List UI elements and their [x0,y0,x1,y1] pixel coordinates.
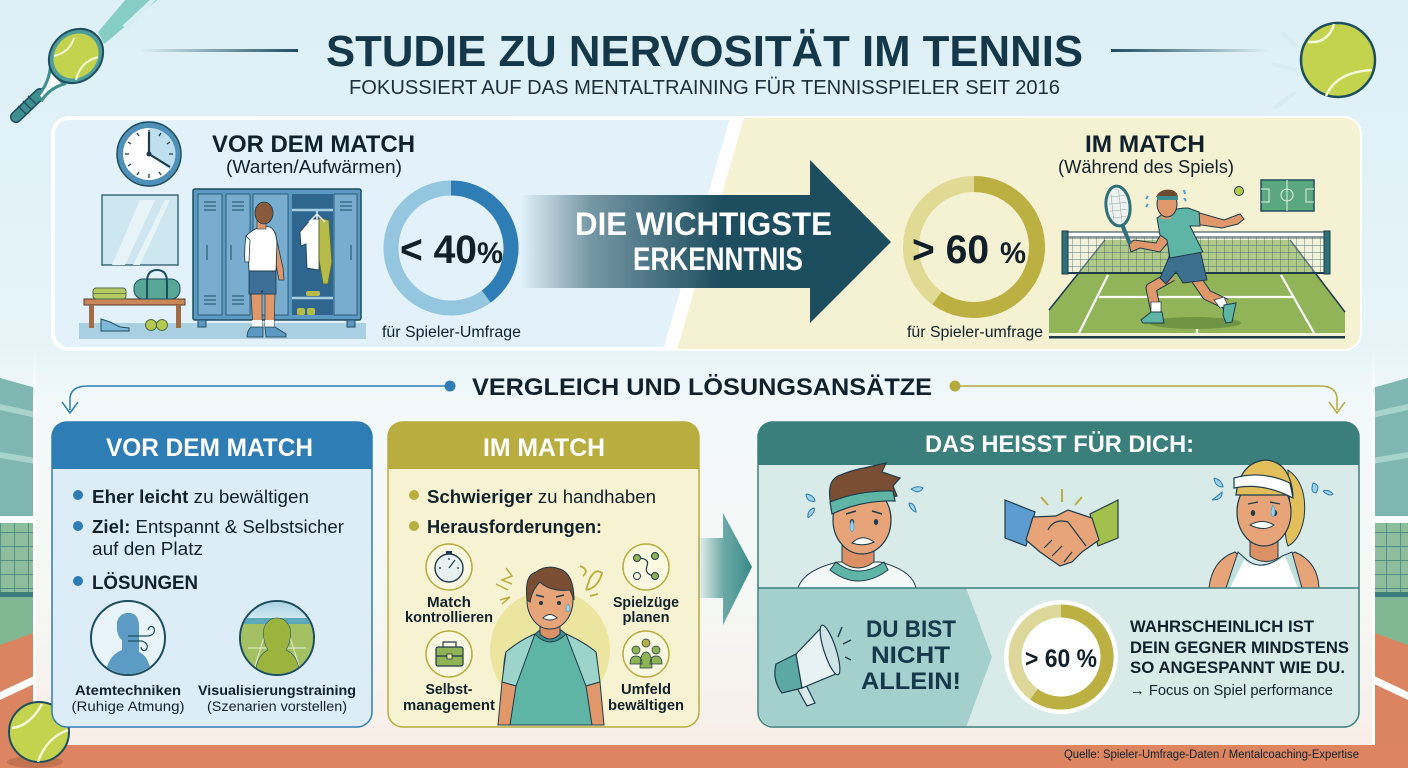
heading: comparison with connector arrows: VERGLEICH UND LÖSUNGSANSÄTZE [472,374,932,401]
sub-element: tennis player [1104,185,1244,323]
panel: in the match [388,422,699,727]
heading: before the match: (Warten/Aufwärmen) [226,157,402,177]
illustration: nervous female player [1209,460,1333,588]
icon: handshake [1005,489,1118,566]
illustration: stressed player [490,566,610,725]
donut chart: under 40 percent: für Spieler-Umfrage [382,324,521,341]
icon: tennis ball top right [1272,23,1375,108]
bullet list: Schwieriger zu handhaben [427,486,656,507]
icon: people group [623,631,669,677]
arrow: key finding: ERKENNTNIS [633,241,803,277]
panel: what it means for you [758,422,1359,727]
label: self management: Selbst- [426,682,473,698]
icon: tennis racket with ball [16,0,160,117]
label: breathing technique: (Ruhige Atmung) [72,698,184,714]
label: handle surroundings: Umfeld [621,682,671,698]
donut chart: over 60 percent: für Spieler-umfrage [907,324,1043,341]
panel: key finding [53,118,1362,350]
text block: opponent is just as tense: → Focus on Spiel performance [1130,682,1333,699]
illustration: player on court [1049,180,1345,338]
icon: briefcase [426,631,472,677]
icon: stopwatch [426,544,472,590]
callout text [861,616,961,695]
donut chart: under 40 percent [382,188,521,341]
text block: opponent is just as tense: DEIN GEGNER MINDSTENS [1130,639,1349,657]
donut chart: 60 percent: > 60 % [1025,645,1097,673]
heading: comparison with connector arrows [62,374,1345,413]
label: control match: kontrollieren [405,610,493,626]
icon: megaphone [775,623,851,706]
panel header: DAS HEISST FÜR DICH: [925,431,1194,458]
icon: visualisation training [240,600,314,680]
icon: tennis ball bottom left [7,702,69,768]
arrow: key finding: DIE WICHTIGSTE [575,206,832,242]
arrow: towards conclusion [696,513,752,625]
text block: opponent is just as tense: WAHRSCHEINLICH IST [1130,618,1314,636]
label: breathing technique [72,682,184,714]
label: self management: management [403,698,495,714]
bullet list: auf den Platz [92,538,203,559]
icon: game plan [623,544,669,590]
callout text: NICHT [871,642,950,669]
text block: opponent is just as tense [1130,618,1349,699]
donut chart: over 60 percent [907,184,1043,341]
panel header: VOR DEM MATCH [106,434,313,462]
donut chart: 60 percent [1004,600,1118,714]
label: handle surroundings: bewältigen [608,698,684,714]
bullet list [73,486,344,594]
callout text: DU BIST [866,616,956,643]
bullet list [409,486,656,537]
label: plan moves: planen [622,610,670,626]
callout: you are not alone [758,588,1359,727]
heading: in the match [1058,131,1234,177]
label: control match: Match [427,595,471,611]
title [140,27,1269,76]
icon: breathing technique [91,601,165,680]
label: visualisation training: (Szenarien vorstellen) [207,698,347,714]
panel: before the match [52,422,372,727]
label: plan moves [613,595,679,626]
bullet list: Ziel: Entspannt & Selbstsicher [92,516,344,537]
illustration: nervous male player [798,463,923,588]
text block: opponent is just as tense: SO ANGESPANNT WIE DU. [1130,659,1345,677]
label: breathing technique: Atemtechniken [75,682,181,698]
icon: locker room scene [79,189,366,339]
heading: in the match: (Während des Spiels) [1058,157,1234,177]
icon: wall clock [117,122,181,186]
label: handle surroundings [608,682,684,714]
bullet list: Eher leicht zu bewältigen [92,486,309,507]
heading: before the match: VOR DEM MATCH [212,131,415,158]
sub-element: player at locker [245,202,286,337]
title: STUDIE ZU NERVOSITÄT IM TENNIS [326,27,1083,76]
label: self management [403,682,495,714]
label: plan moves: Spielzüge [613,595,679,611]
panel header: IM MATCH [483,434,605,462]
heading: before the match [212,131,415,177]
arrow: key finding [520,160,891,323]
donut chart: over 60 percent: > 60 % [912,228,1026,272]
label: visualisation training: Visualisierungstraining [198,682,356,698]
heading: in the match: IM MATCH [1085,131,1205,158]
label: visualisation training [198,682,356,714]
bullet list: Herausforderungen: [427,516,602,537]
label: control match [405,595,493,626]
source note: Quelle: Spieler-Umfrage-Daten / Mentalcoaching-Expertise [1064,749,1359,761]
bullet list: LÖSUNGEN [92,571,198,594]
subtitle: FOKUSSIERT AUF DAS MENTALTRAINING FÜR TENNISSPIELER SEIT 2016 [349,77,1060,99]
donut chart: under 40 percent: < 40% [400,228,503,272]
callout text: ALLEIN! [861,668,961,695]
